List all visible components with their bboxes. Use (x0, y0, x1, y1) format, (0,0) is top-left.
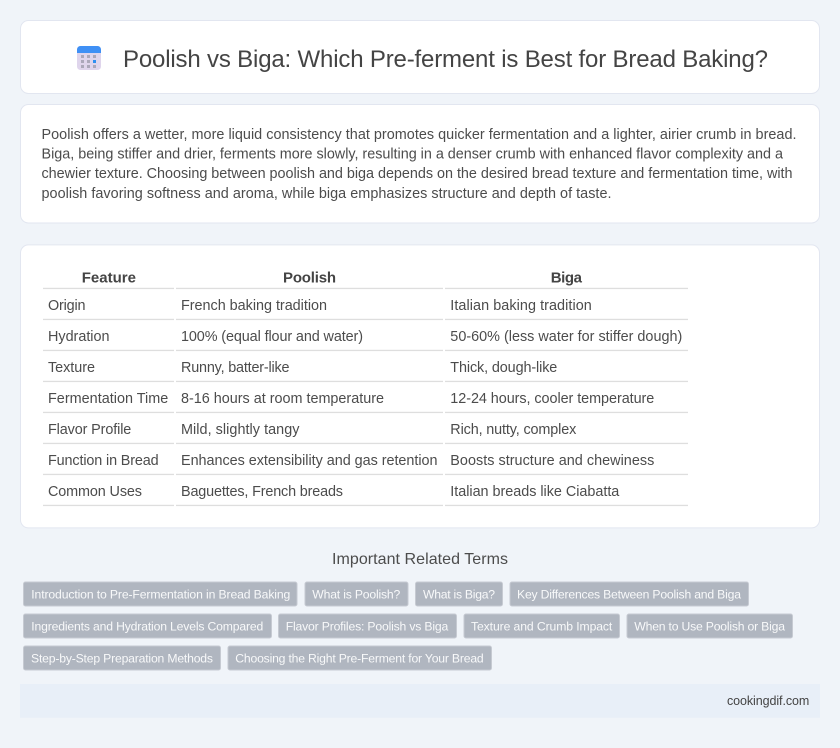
panel: header (20, 20, 820, 94)
tag: Choosing the Right Pre-Ferment for Your Bread (235, 651, 484, 665)
row: flavor profile (48, 422, 577, 438)
tag: Key Differences Between Poolish and Biga (517, 587, 741, 601)
text block: intro: Biga, being stiffer and drier, ferments more slowly, resulting in a denser crumb with enhanced flavor complexity and a (42, 147, 783, 163)
row: origin: Italian baking tradition (450, 298, 592, 314)
tag: What is Biga? (423, 587, 495, 601)
tag (24, 646, 220, 670)
row: fermentation time (48, 391, 654, 407)
icon: calendar (77, 46, 101, 70)
row: common uses: Baguettes, French breads (181, 484, 343, 500)
row: function in bread: Enhances extensibility and gas retention (181, 453, 438, 469)
row: common uses (48, 484, 619, 500)
text block: intro (42, 127, 796, 202)
tag: Ingredients and Hydration Levels Compared (31, 619, 263, 633)
tag (278, 614, 456, 638)
row: texture: Thick, dough-like (450, 360, 557, 376)
row: hydration: Hydration (48, 329, 110, 345)
table header row: Biga (551, 270, 583, 287)
row: common uses: Italian breads like Ciabatta (450, 484, 619, 500)
heading: related terms: Important Related Terms (332, 551, 508, 568)
row: fermentation time: 8-16 hours at room temperature (181, 391, 384, 407)
table header row: Feature (82, 270, 136, 287)
tag (24, 614, 272, 638)
footer bar (20, 684, 820, 718)
row: hydration: 100% (equal flour and water) (181, 329, 363, 345)
row: function in bread (48, 453, 654, 469)
tag (510, 582, 748, 606)
row: texture: Texture (48, 360, 95, 376)
title: Poolish vs Biga: Which Pre-ferment is Best for Bread Baking? (123, 46, 768, 73)
row: flavor profile: Mild, slightly tangy (181, 422, 300, 438)
tag (305, 582, 408, 606)
panel: comparison table (20, 245, 820, 528)
row: hydration (48, 329, 682, 345)
tag (627, 614, 792, 638)
tag: Flavor Profiles: Poolish vs Biga (286, 619, 449, 633)
row: fermentation time: Fermentation Time (48, 391, 168, 407)
row: function in bread: Boosts structure and chewiness (450, 453, 654, 469)
tag (228, 646, 492, 670)
row: origin (48, 298, 592, 314)
text block: intro: Poolish offers a wetter, more liquid consistency that promotes quicker fermentation and a lighter, airier crumb in bread. (42, 127, 796, 143)
tag (416, 582, 502, 606)
tag: Introduction to Pre-Fermentation in Bread Baking (31, 587, 290, 601)
row: texture: Runny, batter-like (181, 360, 290, 376)
tag: When to Use Poolish or Biga (634, 619, 785, 633)
row: flavor profile: Rich, nutty, complex (450, 422, 577, 438)
table header row: Poolish (283, 270, 336, 287)
row: origin: Origin (48, 298, 86, 314)
panel: intro paragraph (20, 104, 820, 223)
row: common uses: Common Uses (48, 484, 142, 500)
row: origin: French baking tradition (181, 298, 327, 314)
row: flavor profile: Flavor Profile (48, 422, 131, 438)
row: hydration: 50-60% (less water for stiffer dough) (450, 329, 682, 345)
tag: Texture and Crumb Impact (471, 619, 613, 633)
tag (464, 614, 620, 638)
tag (24, 582, 297, 606)
tag: Step-by-Step Preparation Methods (31, 651, 213, 665)
footer source: cookingdif.com (727, 694, 809, 708)
row: texture (48, 360, 557, 376)
text block: intro: poolish favoring softness and aroma, while biga emphasizes structure and depth of taste. (42, 186, 612, 202)
tag list: related terms (24, 582, 792, 670)
table header row (82, 270, 583, 287)
row: fermentation time: 12-24 hours, cooler temperature (450, 391, 654, 407)
tag: What is Poolish? (312, 587, 401, 601)
row: function in bread: Function in Bread (48, 453, 159, 469)
text block: intro: chewier texture. Choosing between poolish and biga depends on the desired bread texture and fermentation time, with (42, 166, 792, 182)
